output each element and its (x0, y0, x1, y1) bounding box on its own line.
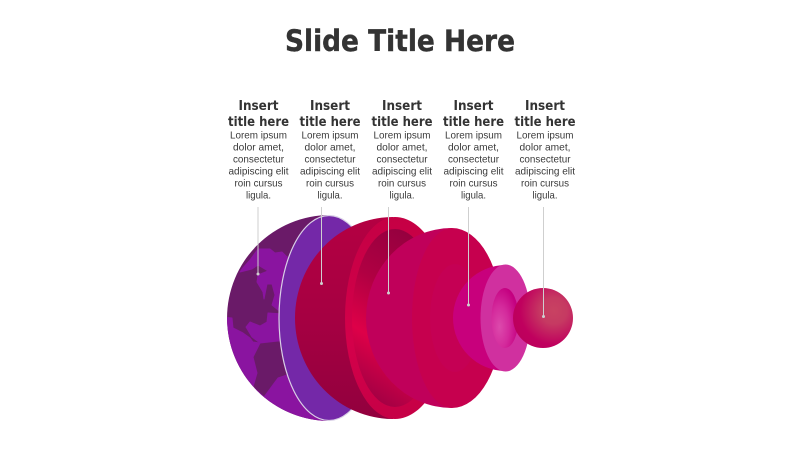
text block 1: title here (228, 115, 289, 130)
text block 1 (228, 99, 289, 202)
text block 4: Lorem ipsum (445, 130, 502, 142)
text block 5: Insert (525, 99, 565, 114)
text block 1: ligula. (246, 190, 271, 202)
text block 1: adipiscing elit (228, 166, 289, 178)
leader line 2 (320, 207, 323, 285)
second layer ring (345, 217, 450, 419)
text block 3: consectetur (376, 154, 428, 166)
text block 2: adipiscing elit (300, 166, 360, 178)
text block 4: dolor amet, (448, 142, 499, 154)
text block 4: roin cursus (450, 178, 498, 190)
text block 4: ligula. (461, 190, 486, 202)
crust ring ellipse (279, 216, 379, 420)
text block 1: Insert (238, 99, 278, 114)
text block 5: ligula. (532, 190, 558, 202)
text block 2: roin cursus (306, 178, 354, 190)
text block 4: Insert (454, 99, 494, 114)
text block 2: consectetur (304, 154, 356, 166)
second layer hollow (352, 229, 438, 407)
text block 1: roin cursus (234, 178, 282, 190)
leader line 4 (467, 207, 470, 306)
text block 3: dolor amet, (376, 142, 428, 154)
text block 3: adipiscing elit (372, 166, 432, 178)
text block 3: title here (372, 115, 433, 130)
text block 5: dolor amet, (520, 142, 570, 154)
text block 4 (443, 99, 504, 202)
text block 2 (300, 99, 361, 202)
text block 5: roin cursus (521, 178, 569, 190)
fourth layer hemisphere (453, 265, 506, 371)
leader line 3 (387, 207, 390, 294)
text block 4: consectetur (448, 154, 500, 166)
text block 3: Insert (382, 99, 422, 114)
text block 3 (372, 99, 433, 202)
leader line 1 (256, 207, 260, 276)
third layer ring (412, 228, 502, 408)
text block 1: Lorem ipsum (230, 130, 287, 142)
text block 5: Lorem ipsum (516, 130, 574, 142)
second layer hemisphere (295, 217, 393, 419)
text block 4: adipiscing elit (444, 166, 504, 178)
text block 5 (514, 99, 576, 202)
text block 2: Lorem ipsum (302, 130, 358, 142)
text block 4: title here (443, 115, 504, 130)
text block 2: title here (300, 115, 361, 130)
text block 5: title here (514, 115, 576, 130)
text block 5: adipiscing elit (515, 166, 575, 178)
text block 3: ligula. (390, 190, 414, 202)
text block 1: dolor amet, (233, 142, 284, 154)
globe layer (227, 215, 328, 421)
text block 3: Lorem ipsum (374, 130, 430, 142)
text block 2: Insert (310, 99, 350, 114)
text block 1: consectetur (233, 154, 285, 166)
leader line 5 (542, 207, 545, 318)
text block 3: roin cursus (378, 178, 426, 190)
text block 2: dolor amet, (304, 142, 356, 154)
core sphere (513, 288, 573, 348)
text block 2: ligula. (318, 190, 342, 202)
third layer inner face (430, 264, 480, 372)
third layer hemisphere (366, 228, 452, 408)
layered globe diagram (220, 213, 573, 430)
text block 5: consectetur (520, 154, 571, 166)
title: Slide Title Here (285, 24, 515, 58)
fourth layer hole (492, 288, 518, 348)
fourth layer ring (480, 264, 530, 372)
